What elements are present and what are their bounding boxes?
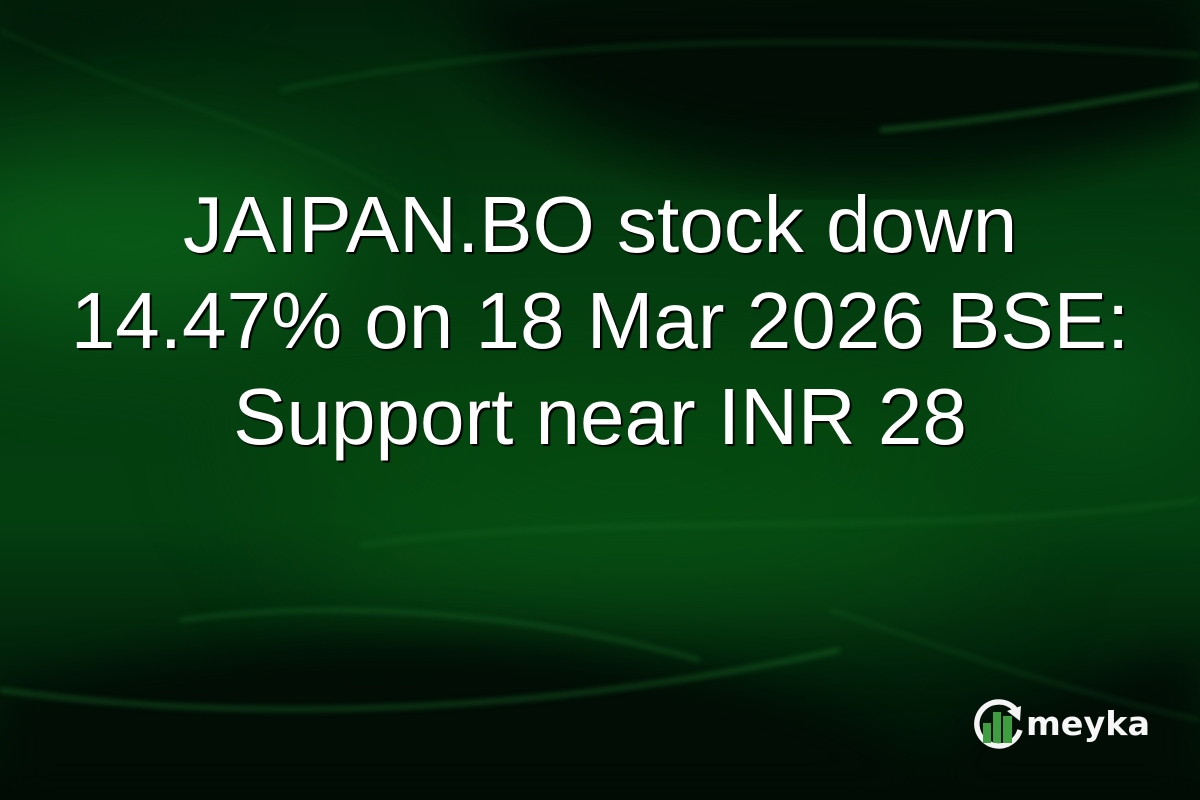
icon: circular arrow with green bars xyxy=(977,702,1021,746)
title: 14.47% on 18 Mar 2026 BSE: xyxy=(71,276,1129,365)
title xyxy=(71,180,1129,463)
title: Support near INR 28 xyxy=(233,372,967,461)
wordmark: meyka xyxy=(1026,704,1150,743)
title: JAIPAN.BO stock down xyxy=(183,180,1017,269)
logo: meyka xyxy=(974,699,1150,749)
